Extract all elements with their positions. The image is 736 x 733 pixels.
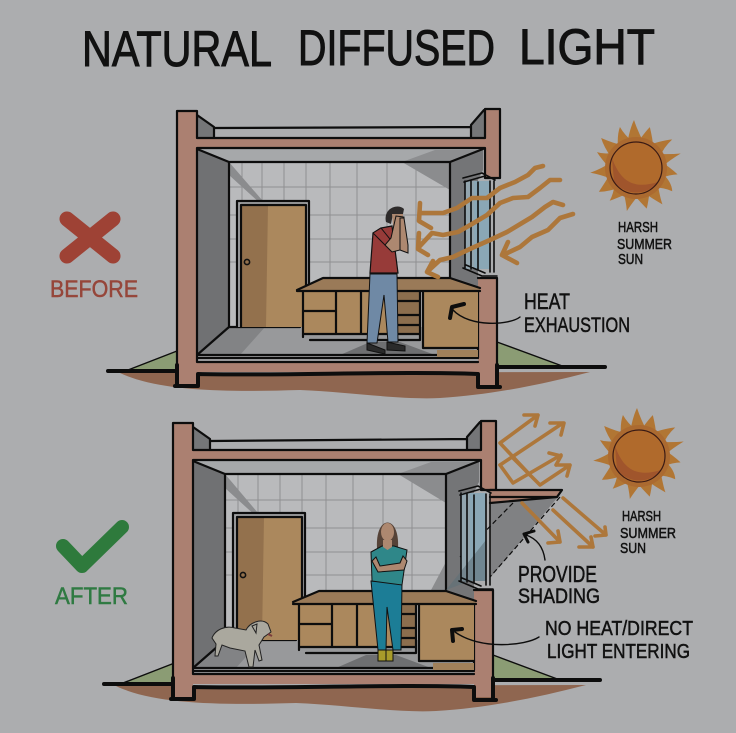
door [237, 201, 309, 327]
label: no heat direct light entering [545, 618, 693, 663]
label: harsh summer sun [617, 219, 672, 268]
woman with crossed arms [371, 522, 407, 661]
ceiling, side walls and floor [193, 461, 479, 668]
counter and cabinets [297, 278, 520, 357]
label: harsh summer sun: SUMMER [617, 236, 672, 253]
title: LIGHT [519, 19, 655, 75]
label: provide shading with pointer: PROVIDE [518, 561, 597, 587]
label: before: BEFORE [50, 276, 138, 303]
man covering face [367, 207, 408, 354]
window [446, 486, 493, 590]
label: harsh summer sun: HARSH [618, 219, 658, 236]
ground and grass [104, 655, 600, 711]
title [82, 19, 655, 77]
label: harsh summer sun [620, 508, 676, 557]
title: DIFFUSED [298, 20, 495, 76]
dog [212, 621, 272, 667]
icon: green check [63, 527, 122, 566]
door [233, 513, 305, 640]
heat arrows [418, 166, 573, 277]
shading arrows reflected [500, 415, 606, 547]
label: harsh summer sun: SUN [618, 251, 643, 268]
ground and grass [108, 342, 605, 398]
back tiled wall [229, 162, 450, 327]
icon: sun [592, 408, 686, 501]
label: provide shading with pointer: SHADING [518, 585, 600, 608]
back tiled wall [225, 474, 447, 640]
window [463, 173, 497, 276]
label: harsh summer sun: HARSH [622, 508, 661, 525]
label: after: AFTER [55, 583, 128, 610]
label: heat exhaustion: HEAT [524, 289, 570, 314]
label: heat exhaustion [524, 289, 630, 337]
icon: sun [589, 120, 683, 213]
ceiling, side walls and floor [197, 149, 483, 355]
panel: after house section [104, 408, 693, 711]
label: harsh summer sun: SUN [620, 540, 646, 557]
label: provide shading with pointer [518, 531, 600, 608]
label: no heat direct light entering: LIGHT ENTERING [547, 641, 690, 663]
concrete structure [171, 421, 496, 700]
title: NATURAL [82, 21, 272, 77]
counter and cabinets [293, 591, 539, 670]
shading canopy and shadow [460, 490, 562, 578]
icon: red cross [67, 219, 113, 256]
label: harsh summer sun: SUMMER [620, 525, 676, 542]
label: heat exhaustion: EXHAUSTION [524, 314, 630, 337]
panel: before house section [108, 109, 683, 398]
label: no heat direct light entering: NO HEAT/DIRECT [545, 618, 693, 640]
concrete structure [175, 109, 500, 387]
